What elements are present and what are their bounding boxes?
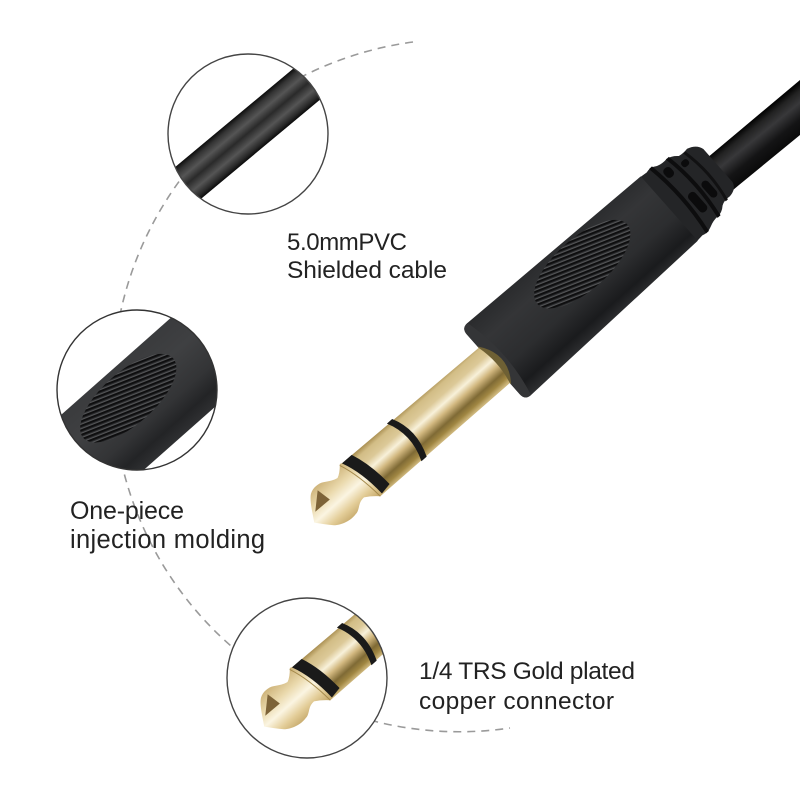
dashed connector arc — [113, 42, 510, 732]
inset: gold tip detail — [226, 597, 388, 759]
inset: moulded grip detail — [56, 309, 218, 471]
product: quarter inch TRS plug with cable — [282, 80, 800, 559]
label: connector — [419, 658, 635, 715]
inset: cable detail — [167, 53, 329, 215]
moulded body with grip — [461, 173, 701, 400]
label: connector: 1/4 TRS Gold plated — [419, 658, 635, 685]
label: cable: Shielded cable — [287, 257, 447, 284]
label: cable: 5.0mmPVC — [287, 229, 407, 256]
label: molding — [70, 497, 265, 554]
label: molding: injection molding — [70, 526, 265, 554]
cable — [688, 80, 800, 206]
plug assembly — [282, 130, 750, 559]
gold plated tip — [296, 342, 512, 541]
label: molding: One-piece — [70, 497, 184, 525]
strain relief boot — [639, 133, 746, 243]
body end face — [461, 319, 536, 400]
label: connector: copper connector — [419, 688, 614, 715]
shaft collar — [477, 340, 519, 385]
label: cable — [287, 229, 447, 284]
